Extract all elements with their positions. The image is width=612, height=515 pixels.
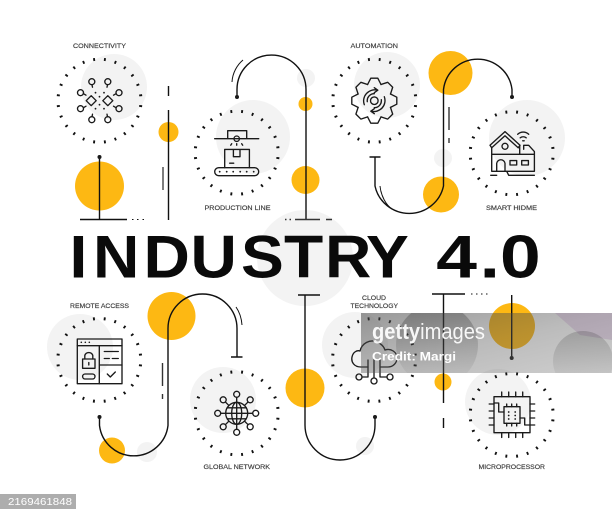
- connector: microprocessor: [432, 294, 514, 428]
- label: production line: PRODUCTION LINE: [204, 205, 270, 212]
- connector: remote access: [98, 294, 242, 456]
- label: cloud technology: TECHNOLOGY: [350, 303, 399, 310]
- label: cloud technology: CLOUD: [362, 295, 386, 302]
- image id tag: [0, 494, 76, 509]
- connector: connectivity: [80, 86, 168, 220]
- label: connectivity: CONNECTIVITY: [73, 43, 127, 50]
- title: INDUSTRY: [70, 224, 409, 291]
- watermark brand text: gettyimages: [372, 319, 485, 344]
- icon: remote access: [58, 318, 141, 402]
- connector: cloud technology: [298, 295, 377, 460]
- watermark credit text: Credit: Margi: [372, 350, 456, 364]
- connector: production line: [232, 55, 332, 220]
- label: automation: AUTOMATION: [350, 43, 398, 50]
- title: 4.0: [436, 224, 541, 291]
- icon: global network: [195, 372, 278, 455]
- label: global network: GLOBAL NETWORK: [204, 464, 271, 471]
- background grey circles: [47, 52, 565, 462]
- icon: cloud technology: [332, 318, 416, 402]
- icon: connectivity: [58, 59, 141, 142]
- watermark band: [361, 313, 612, 373]
- label: microprocessor: MICROPROCESSOR: [478, 464, 545, 471]
- icon: automation gear: [333, 59, 416, 142]
- icon: smart home: [470, 112, 553, 195]
- label: cloud technology: [350, 295, 399, 310]
- label: remote access: REMOTE ACCESS: [70, 303, 129, 310]
- label: smart home: SMART HIDME: [486, 205, 537, 212]
- icon: production line: [195, 111, 278, 194]
- connector: automation: [370, 59, 514, 213]
- image id tag: 2169461848: [8, 496, 72, 508]
- yellow accent circles: [75, 51, 535, 464]
- icon: microprocessor: [470, 374, 553, 456]
